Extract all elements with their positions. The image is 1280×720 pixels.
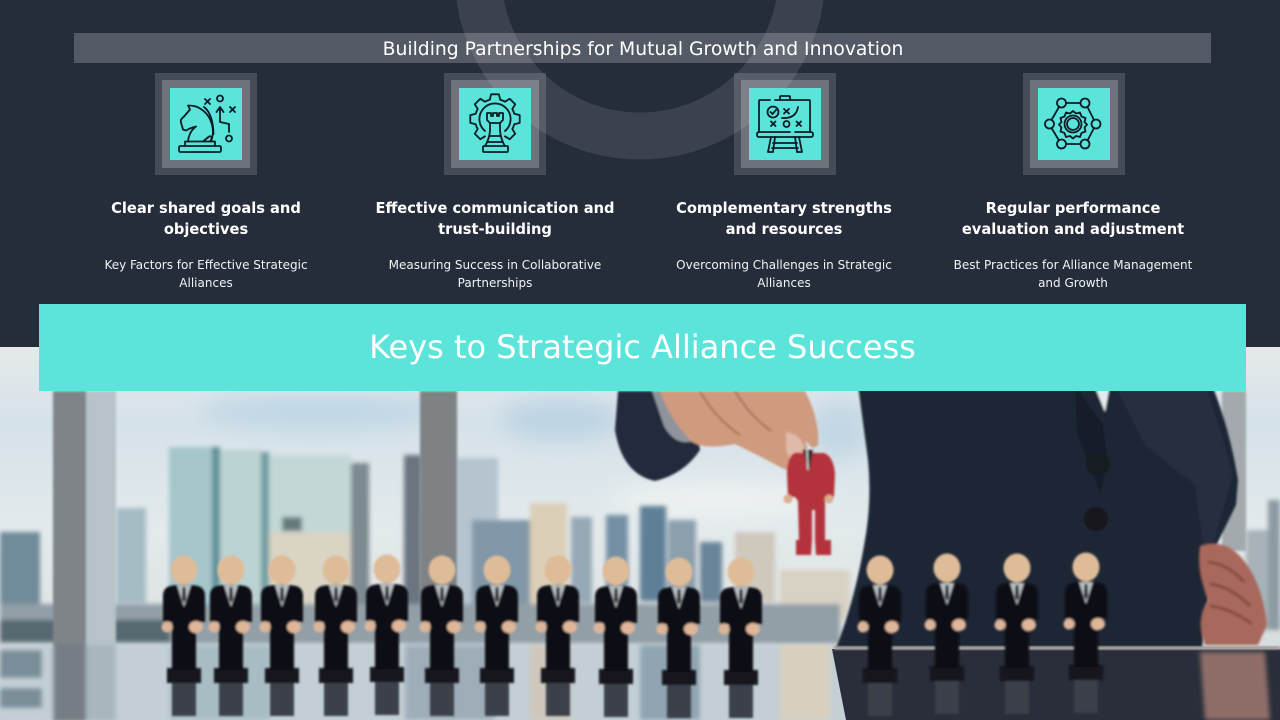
heading: Regular performance bbox=[986, 200, 1160, 217]
heading: objectives bbox=[164, 221, 248, 238]
heading: Effective communication and bbox=[375, 200, 615, 217]
photo: businessman picking a red figure from a row of figures bbox=[0, 347, 1280, 720]
description bbox=[104, 258, 308, 290]
description: and Growth bbox=[1038, 276, 1108, 290]
column: effective communication bbox=[375, 200, 615, 290]
subtitle band: Building Partnerships for Mutual Growth and Innovation bbox=[383, 39, 903, 60]
heading: and resources bbox=[726, 221, 842, 238]
description: Best Practices for Alliance Management bbox=[954, 258, 1192, 272]
description bbox=[954, 258, 1192, 290]
description: Key Factors for Effective Strategic bbox=[104, 258, 308, 272]
heading bbox=[676, 200, 892, 238]
icon: strategy whiteboard bbox=[734, 73, 836, 175]
heading: Complementary strengths bbox=[676, 200, 892, 217]
heading: trust-building bbox=[438, 221, 552, 238]
description: Alliances bbox=[179, 276, 233, 290]
businessman suit bbox=[836, 385, 1238, 648]
title banner bbox=[39, 304, 1246, 390]
heading: Clear shared goals and bbox=[111, 200, 301, 217]
icon: knight strategy bbox=[155, 73, 257, 175]
heading bbox=[375, 200, 615, 238]
column: complementary strengths bbox=[676, 200, 892, 290]
glass table surface and reflections bbox=[0, 645, 840, 720]
red figure bbox=[784, 450, 835, 555]
heading: evaluation and adjustment bbox=[962, 221, 1184, 238]
blurred city skyline background bbox=[0, 347, 1280, 720]
dark table reflection under the suit bbox=[832, 646, 1280, 720]
title banner: Keys to Strategic Alliance Success bbox=[369, 328, 916, 366]
decorative ring behind header bbox=[456, 0, 824, 160]
description bbox=[676, 258, 892, 290]
column: performance evaluation bbox=[954, 200, 1192, 290]
column: clear shared goals bbox=[104, 200, 308, 290]
icon: gear network bbox=[1023, 73, 1125, 175]
icon: rook in gear bbox=[444, 73, 546, 175]
description bbox=[389, 258, 601, 290]
heading bbox=[962, 200, 1184, 238]
description: Overcoming Challenges in Strategic bbox=[676, 258, 892, 272]
subtitle band bbox=[74, 33, 1211, 63]
four figures in front of the suit bbox=[858, 552, 1107, 716]
description: Measuring Success in Collaborative bbox=[389, 258, 601, 272]
description: Partnerships bbox=[458, 276, 532, 290]
description: Alliances bbox=[757, 276, 811, 290]
sleeve and hand holding figure bbox=[615, 391, 818, 481]
heading bbox=[111, 200, 301, 238]
row of eleven figures bbox=[162, 554, 762, 718]
businessman left hand bbox=[1199, 544, 1267, 645]
